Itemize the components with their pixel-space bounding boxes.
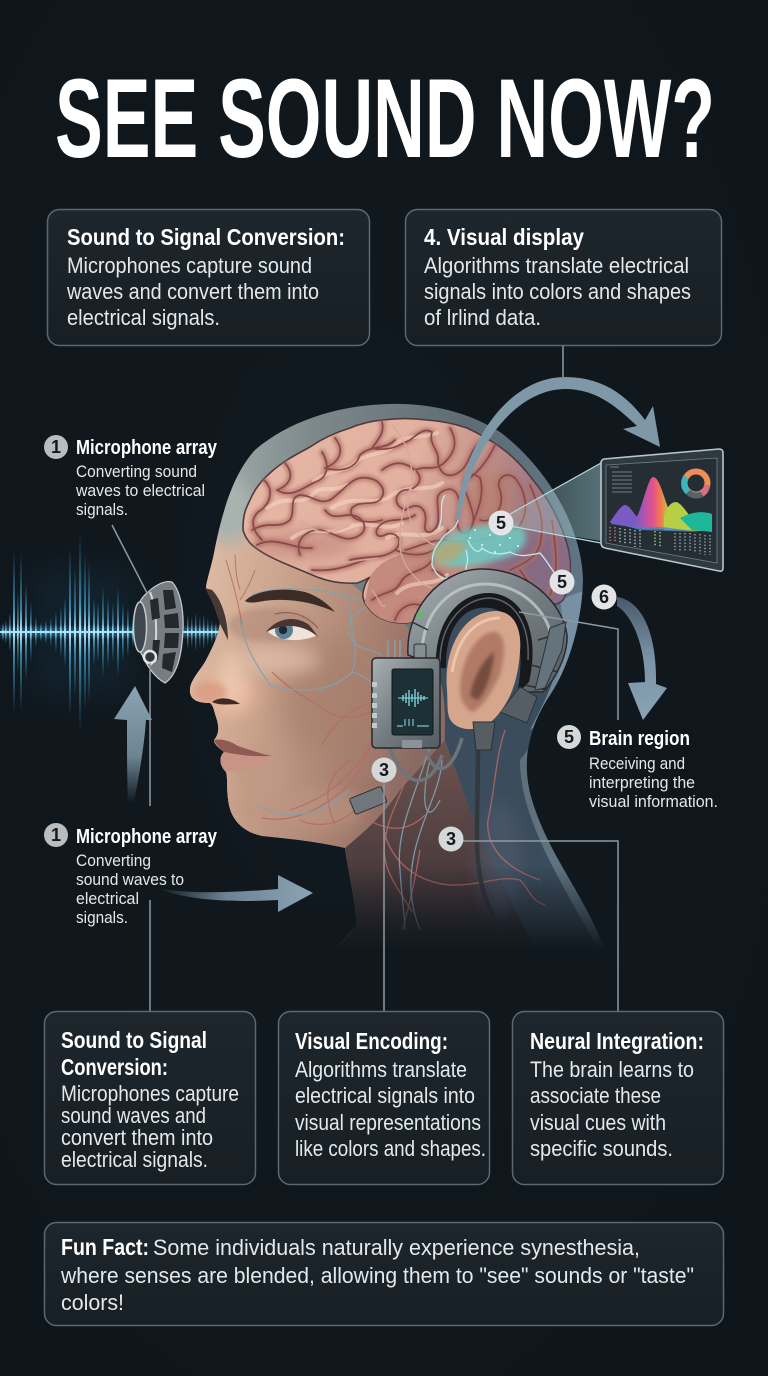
panel body text: [61, 1081, 239, 1172]
arrow: microphone upward: [114, 686, 152, 803]
panel heading: Sound to Signal: [61, 1027, 207, 1053]
number badge 5 on brain: 5: [496, 513, 506, 533]
label: brain region: Brain region: [589, 728, 690, 750]
neural pathways: [432, 495, 558, 578]
visual display beam: [510, 463, 601, 543]
connector lines: [112, 346, 618, 1011]
number badge 5 on lower brain: [550, 570, 574, 594]
number badge 3 on device: 3: [379, 760, 389, 780]
panel body text: electrical signals.: [67, 305, 220, 330]
label: brain region: [557, 725, 718, 811]
panel: sound to signal conversion (bottom): [44, 1012, 256, 1184]
number badge 6: 6: [599, 587, 609, 607]
skin shading: [190, 608, 363, 826]
panel body text: waves and convert them into: [66, 279, 319, 304]
number badge 3 on neck: 3: [446, 829, 456, 849]
label: microphone array (top): signals.: [76, 500, 128, 519]
panel body text: electrical signals.: [61, 1147, 208, 1172]
chart: colored mountains: [610, 477, 712, 532]
panel body text: like colors and shapes.: [295, 1136, 486, 1161]
nostril: [212, 698, 240, 704]
panel: visual encoding: [278, 1012, 490, 1184]
number badge 3 on device: [372, 758, 396, 782]
panel: neural integration: [512, 1012, 724, 1184]
microphone array: [134, 582, 183, 683]
panel body text: electrical signals into: [295, 1083, 475, 1108]
fun fact text: Some individuals naturally experience synesthesia,: [153, 1235, 640, 1260]
sound waveform: [0, 532, 222, 732]
label: brain region: visual information.: [589, 792, 718, 811]
panel heading: Sound to Signal Conversion:: [67, 224, 345, 250]
number badge 3 on neck: [438, 826, 464, 852]
soft fold shading: [252, 422, 556, 620]
label: microphone array (lower): Converting: [76, 851, 151, 870]
label: brain region: interpreting the: [589, 773, 695, 792]
label: microphone array (lower): signals.: [76, 908, 128, 927]
number badge 6: [592, 584, 616, 610]
chart: text lines and data grid: [610, 467, 710, 555]
neck fade: [250, 865, 670, 972]
panel body text: associate these: [530, 1083, 661, 1108]
panel heading: Conversion:: [61, 1054, 168, 1080]
label: microphone array (top): waves to electrical: [75, 481, 205, 500]
fun fact text: where senses are blended, allowing them to "see" sounds or "taste": [60, 1263, 694, 1288]
label: microphone array (lower): electrical: [76, 889, 139, 908]
chart: donut: [684, 472, 708, 496]
label: microphone array (top): [44, 435, 218, 519]
label: microphone array (lower): sound waves to: [76, 870, 184, 889]
panel body text: of lrlind data.: [424, 305, 541, 330]
label: microphone array (lower): 1: [51, 825, 61, 845]
panel body text: signals into colors and shapes: [424, 279, 691, 304]
lips: [214, 739, 272, 772]
panel: sound to signal conversion (top): [48, 210, 370, 346]
panel body text: The brain learns to: [530, 1057, 694, 1082]
panel body text: [530, 1057, 694, 1161]
fun fact label: Fun Fact:: [61, 1234, 149, 1260]
panel body text: [424, 253, 691, 330]
number badge 5 on lower brain: 5: [557, 572, 567, 592]
sulci: [252, 422, 556, 620]
panel body text: visual cues with: [530, 1110, 666, 1135]
teal glow region: [433, 525, 526, 567]
cable connector: [473, 722, 495, 750]
label: microphone array (top): Microphone array: [76, 437, 218, 459]
panel body text: visual representations: [295, 1110, 481, 1135]
neck: [344, 740, 526, 942]
panel body text: [66, 253, 319, 330]
device with screen: [349, 640, 462, 815]
panel body text: sound waves and: [61, 1103, 206, 1128]
fun fact text: [60, 1235, 694, 1315]
ear: [446, 611, 520, 729]
neck and face vessels: [262, 672, 545, 930]
label: microphone array (top): 1: [51, 437, 61, 457]
label: microphone array (lower): Microphone array: [76, 826, 218, 848]
panel heading: Visual Encoding:: [295, 1028, 448, 1054]
arrow: from 6 downward: [617, 597, 667, 720]
headset ring around ear: [408, 569, 567, 723]
arrow: curved to visual display: [456, 377, 660, 520]
panel body text: Algorithms translate electrical: [424, 253, 689, 278]
panel body text: Algorithms translate: [295, 1057, 467, 1082]
label: microphone array (top): Converting sound: [76, 462, 197, 481]
panel: fun fact: [44, 1222, 724, 1326]
panel body text: convert them into: [61, 1125, 213, 1150]
eye: [205, 588, 318, 640]
panel body text: specific sounds.: [530, 1136, 673, 1161]
panel: visual display: [406, 210, 722, 346]
arrow: to neck: [157, 875, 313, 912]
panel body text: Microphones capture: [61, 1081, 239, 1106]
panel body text: Microphones capture sound: [67, 253, 312, 278]
label: brain region: Receiving and: [589, 754, 685, 773]
head silhouette: [190, 404, 602, 944]
visual display screen: [601, 449, 723, 571]
highlight folds: [267, 433, 447, 593]
panel heading: Neural Integration:: [530, 1028, 704, 1054]
label: microphone array (lower): [44, 823, 218, 927]
panel heading: 4. Visual display: [424, 224, 584, 250]
brain: [243, 418, 575, 625]
eyebrow: [245, 590, 335, 612]
number badge 5 on brain: [488, 510, 514, 536]
cable: [477, 748, 505, 935]
skin: face: [190, 520, 445, 860]
forehead shell blend: [216, 474, 252, 550]
fun fact text: colors!: [61, 1290, 124, 1315]
panel body text: [295, 1057, 486, 1161]
label: brain region: 5: [564, 727, 574, 747]
panel heading: [61, 1027, 207, 1080]
